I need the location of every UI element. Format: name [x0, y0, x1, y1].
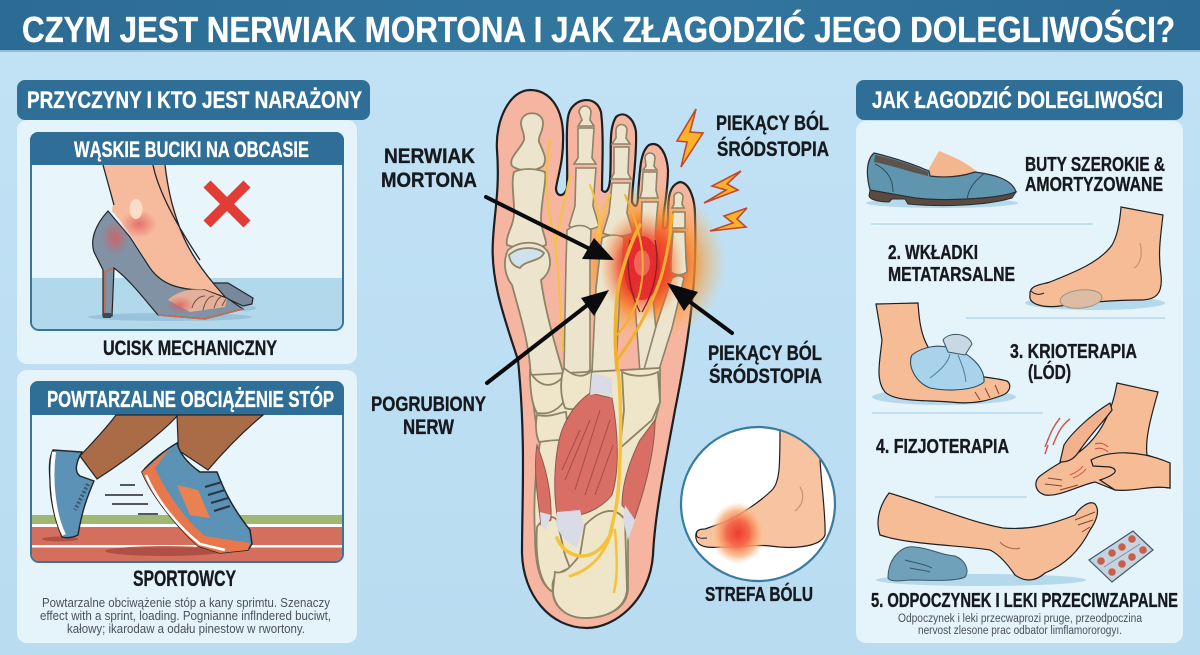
text block: description of load: kałowy; ikarodaw a odału pinestow w rwortony.	[67, 622, 305, 636]
label: burning midfoot pain top	[716, 111, 829, 161]
icon: high heel shoe on foot	[88, 165, 256, 321]
foot outline	[493, 90, 695, 628]
big toe bones	[505, 113, 563, 384]
label: physiotherapy: 4. FIZJOTERAPIA	[876, 436, 1009, 458]
panel: causes heading: PRZYCZYNY I KTO JEST NARAŻONY	[27, 87, 362, 114]
heels card heading: WĄSKIE BUCIKI NA OBCASIE	[74, 137, 309, 162]
label: metatarsal inserts: 2. WKŁADKI	[888, 242, 978, 264]
label: cryotherapy: 3. KRIOTERAPIA	[1010, 341, 1137, 363]
icon: blister of pills	[1089, 531, 1153, 582]
label: Morton neuroma: MORTONA	[381, 169, 477, 192]
arrow: to thickened nerve	[487, 290, 609, 383]
label: thickened nerve: POGRUBIONY	[371, 393, 486, 416]
panel: repetitive load	[17, 370, 357, 643]
label: burning midfoot pain bottom	[708, 341, 822, 388]
label: athletes: SPORTOWCY	[133, 566, 236, 591]
inflamed Morton neuroma	[624, 236, 660, 312]
inset: pain zone on foot	[681, 425, 835, 581]
text block: description of load: Powtarzalne obciwążenie stóp a kany sprimtu. Szenaczy	[42, 596, 331, 610]
panel: relief heading	[856, 80, 1183, 120]
panel: relief methods	[856, 121, 1183, 643]
label: burning midfoot pain top: ŚRÓDSTOPIA	[717, 137, 829, 161]
label: wide cushioned shoes	[1025, 154, 1165, 196]
label: pain zone: STREFA BÓLU	[705, 582, 813, 606]
icon: wide shoe	[866, 151, 1018, 208]
nerves	[547, 140, 672, 592]
heels card background	[30, 132, 344, 330]
running card heading: POWTARZALNE OBCIĄŻENIE STÓP	[47, 385, 334, 412]
text block: description of load	[40, 596, 331, 636]
label: thickened nerve	[371, 393, 486, 439]
tendons	[540, 373, 635, 547]
label: burning midfoot pain bottom: PIEKĄCY BÓL	[708, 341, 822, 365]
label: thickened nerve: NERW	[403, 416, 454, 439]
icon: foot massage hands	[1036, 383, 1170, 495]
label: wide cushioned shoes: AMORTYZOWANE	[1025, 174, 1163, 196]
label: burning midfoot pain top: PIEKĄCY BÓL	[716, 111, 829, 135]
label: cryotherapy: (LÓD)	[1028, 360, 1071, 384]
icon: foot on ice pack	[872, 303, 1016, 405]
arrow: to burning pain	[667, 283, 732, 333]
icon: elevated leg on cushion	[876, 493, 1097, 586]
foot anatomy illustration	[493, 90, 726, 628]
tarsal bones	[530, 368, 660, 618]
pain glow	[570, 183, 726, 343]
label: burning midfoot pain bottom: ŚRÓDSTOPIA	[709, 364, 822, 388]
tarsal bones base	[530, 368, 660, 618]
toe bones	[564, 106, 687, 376]
label: metatarsal inserts	[888, 242, 1015, 286]
text block: rest description: Odpoczynek i leki przecwaprozi pruge, przeodpoczina	[898, 613, 1143, 625]
panel: narrow high heels	[17, 120, 357, 364]
divider lines group	[871, 224, 1165, 497]
text block: rest description: nervost zlesone prac odbator limflamororogyı.	[918, 625, 1122, 637]
text block: description of load: effect with a sprint, loading. Pognianne inflndered buciwt,	[40, 609, 331, 623]
icon: red cross	[207, 184, 247, 224]
label: Morton neuroma: NERWIAK	[384, 145, 475, 168]
icon: lightning bolts	[677, 109, 747, 231]
inflammation over metatarsals	[600, 210, 684, 322]
arrow: to Morton neuroma	[486, 197, 614, 260]
label: metatarsal inserts: METATARSALNE	[888, 264, 1015, 286]
running card background	[30, 381, 344, 562]
muscles	[536, 393, 655, 525]
label: mechanical pressure: UCISK MECHANICZNY	[103, 337, 277, 360]
text block: rest description	[898, 613, 1143, 637]
icon: foot with insert	[1025, 207, 1165, 310]
label: Morton neuroma	[381, 145, 477, 192]
label: cryotherapy	[1010, 341, 1137, 384]
panel: causes heading	[17, 80, 370, 120]
icon: running legs and shoes	[42, 415, 263, 556]
